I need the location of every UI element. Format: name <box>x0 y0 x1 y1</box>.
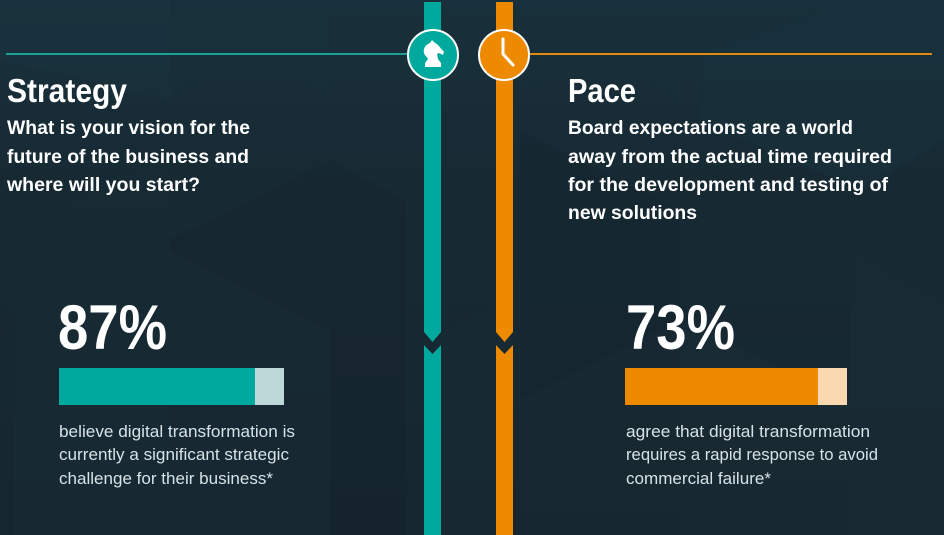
description: 87%: challenge for their business* <box>59 469 273 488</box>
subheading: Strategy question: where will you start? <box>6 175 200 196</box>
orange header rule <box>525 53 932 55</box>
subheading: Strategy question: future of the business and <box>7 147 249 168</box>
description: 73%: commercial failure* <box>626 469 771 488</box>
description: 73%: agree that digital transformation <box>626 422 870 441</box>
description: 87% <box>59 422 295 488</box>
heading: Strategy: Strategy <box>7 72 128 109</box>
subheading: Pace statement: for the development and testing of <box>568 175 889 196</box>
heading: Pace: Pace <box>568 72 636 109</box>
subheading: Pace statement: away from the actual time required <box>568 147 892 168</box>
subheading: Strategy question <box>6 118 250 196</box>
bar: 87% <box>59 368 284 405</box>
icon: clock <box>479 30 529 80</box>
description: 87%: currently a significant strategic <box>59 445 290 464</box>
subheading: Pace statement: Board expectations are a world <box>568 118 853 139</box>
icon: chess knight <box>408 30 458 80</box>
subheading: Pace statement <box>568 118 892 224</box>
stat: 87%: 87% <box>58 293 167 363</box>
description: 73% <box>626 422 878 488</box>
subheading: Strategy question: What is your vision for the <box>7 118 250 139</box>
description: 87%: believe digital transformation is <box>59 422 295 441</box>
orange vertical arrow line <box>496 2 513 535</box>
teal vertical arrow line <box>424 2 441 535</box>
subheading: Pace statement: new solutions <box>568 203 697 224</box>
bar: 73% <box>625 368 847 405</box>
description: 73%: requires a rapid response to avoid <box>626 445 878 464</box>
teal header rule <box>6 53 414 55</box>
stat: 73%: 73% <box>626 293 735 363</box>
